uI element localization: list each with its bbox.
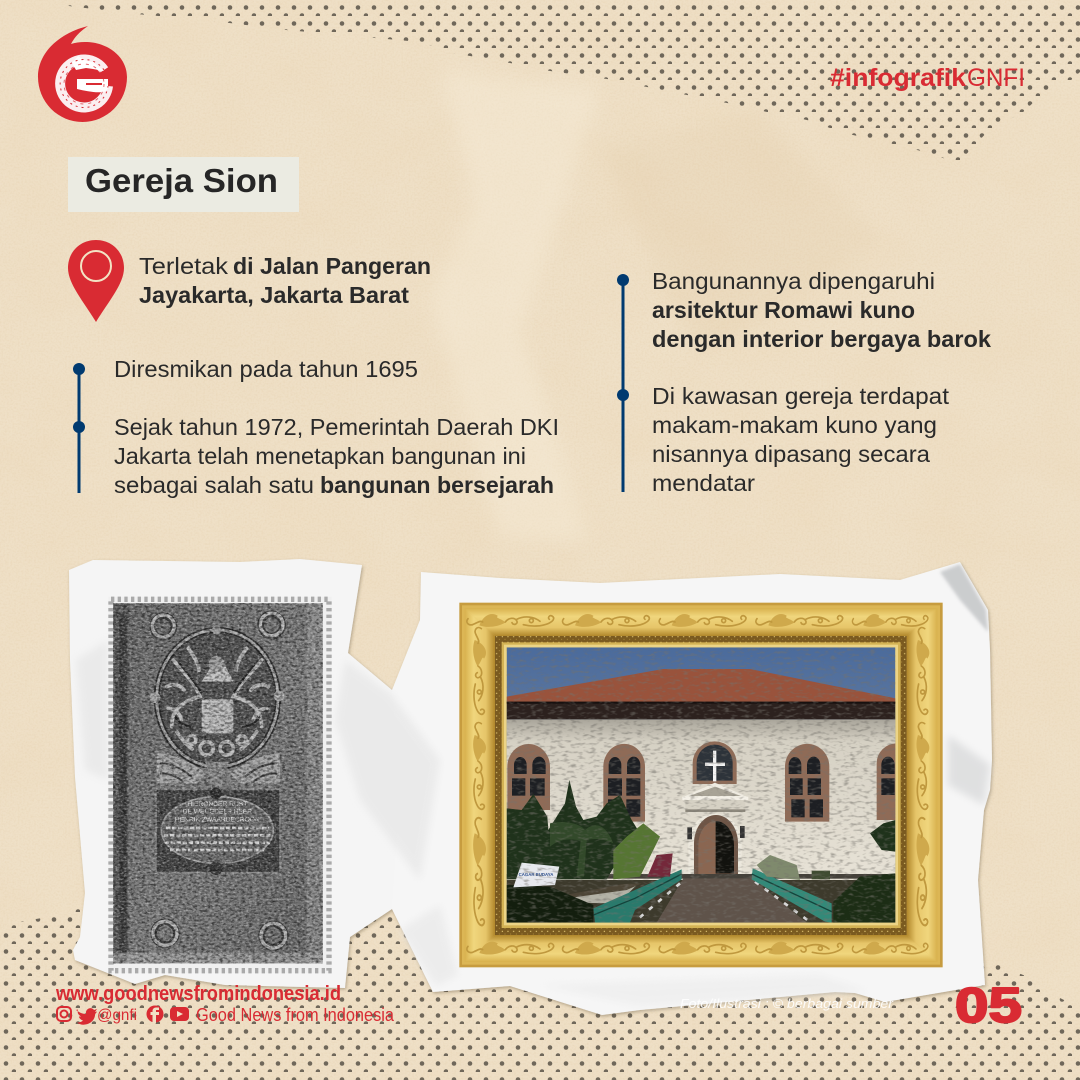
coat of arms medallion [150, 625, 284, 767]
icon: youtube [170, 1007, 189, 1021]
footer links: www.goodnewsfromindonesia.id [55, 983, 341, 1005]
halftone dots top [20, 0, 1080, 163]
timeline left [73, 363, 85, 493]
text: location: Jayakarta, Jakarta Barat [139, 282, 409, 308]
photo: church in gold frame [459, 603, 943, 967]
sign [513, 863, 559, 887]
frame ornaments [467, 614, 929, 955]
text: heritage status [114, 414, 559, 498]
inscription plate: DE WEL EDELE HEER [183, 808, 252, 815]
text: heritage status: Sejak tahun 1972, Pemerintah Daerah DKI [114, 414, 559, 440]
ring handles [152, 613, 286, 948]
icon: instagram [57, 1007, 71, 1021]
text: tombs: Di kawasan gereja terdapat [652, 383, 950, 409]
text: tombs: nisannya dipasang secara [652, 441, 930, 467]
text: tombs [652, 383, 950, 496]
hashtag: #infografik [830, 64, 966, 92]
halftone dots bottom [0, 905, 1080, 1080]
path and ground [507, 880, 895, 923]
timeline right [617, 274, 629, 492]
pediment and door [684, 782, 746, 796]
logo emblem [60, 56, 108, 107]
text: architecture: Bangunannya dipengaruhi [652, 268, 935, 294]
text: architecture: arsitektur Romawi kuno [652, 297, 915, 323]
windows [507, 741, 917, 822]
icon: location pin [68, 240, 124, 322]
hashtag [830, 64, 1025, 92]
footer links: @gnfi [97, 1007, 137, 1024]
text: heritage status: bangunan bersejarah [320, 472, 554, 498]
title: Gereja Sion [85, 162, 278, 199]
torn white paper [69, 559, 992, 1015]
inscription plate: HIERONDER RUST [187, 801, 247, 808]
photo: tombstone [108, 597, 332, 973]
inscription plate [156, 788, 280, 875]
page number: 05 [955, 979, 1022, 1033]
footer links [55, 983, 395, 1025]
text: location: di Jalan Pangeran [233, 253, 431, 279]
gold frame [459, 603, 943, 967]
icon: twitter [76, 1008, 97, 1025]
text: heritage status: sebagai salah satu [114, 472, 314, 498]
photo credit: Foto/Ilustrasi : © berbagai sumber [680, 996, 894, 1011]
text: architecture: dengan interior bergaya barok [652, 326, 991, 352]
footer links: Good News from Indonesia [196, 1005, 395, 1025]
sign: CAGAR BUDAYA [519, 872, 554, 877]
logo [38, 26, 127, 122]
railings [593, 869, 682, 923]
church scene [507, 647, 917, 923]
title [68, 157, 299, 212]
inscription plate: HENRIK ZWAARDECROON [175, 816, 260, 823]
text: inauguration: Diresmikan pada tahun 1695 [114, 356, 418, 382]
hashtag: GNFI [967, 64, 1025, 92]
text: architecture [652, 268, 991, 352]
trees [507, 780, 895, 923]
text: tombs: mendatar [652, 470, 755, 496]
icon: facebook [146, 1006, 164, 1023]
text: location [139, 253, 431, 308]
text: location: Terletak [139, 253, 229, 279]
wings [157, 753, 280, 788]
text: tombs: makam-makam kuno yang [652, 412, 937, 438]
text: heritage status: Jakarta telah menetapkan bangunan ini [114, 443, 526, 469]
